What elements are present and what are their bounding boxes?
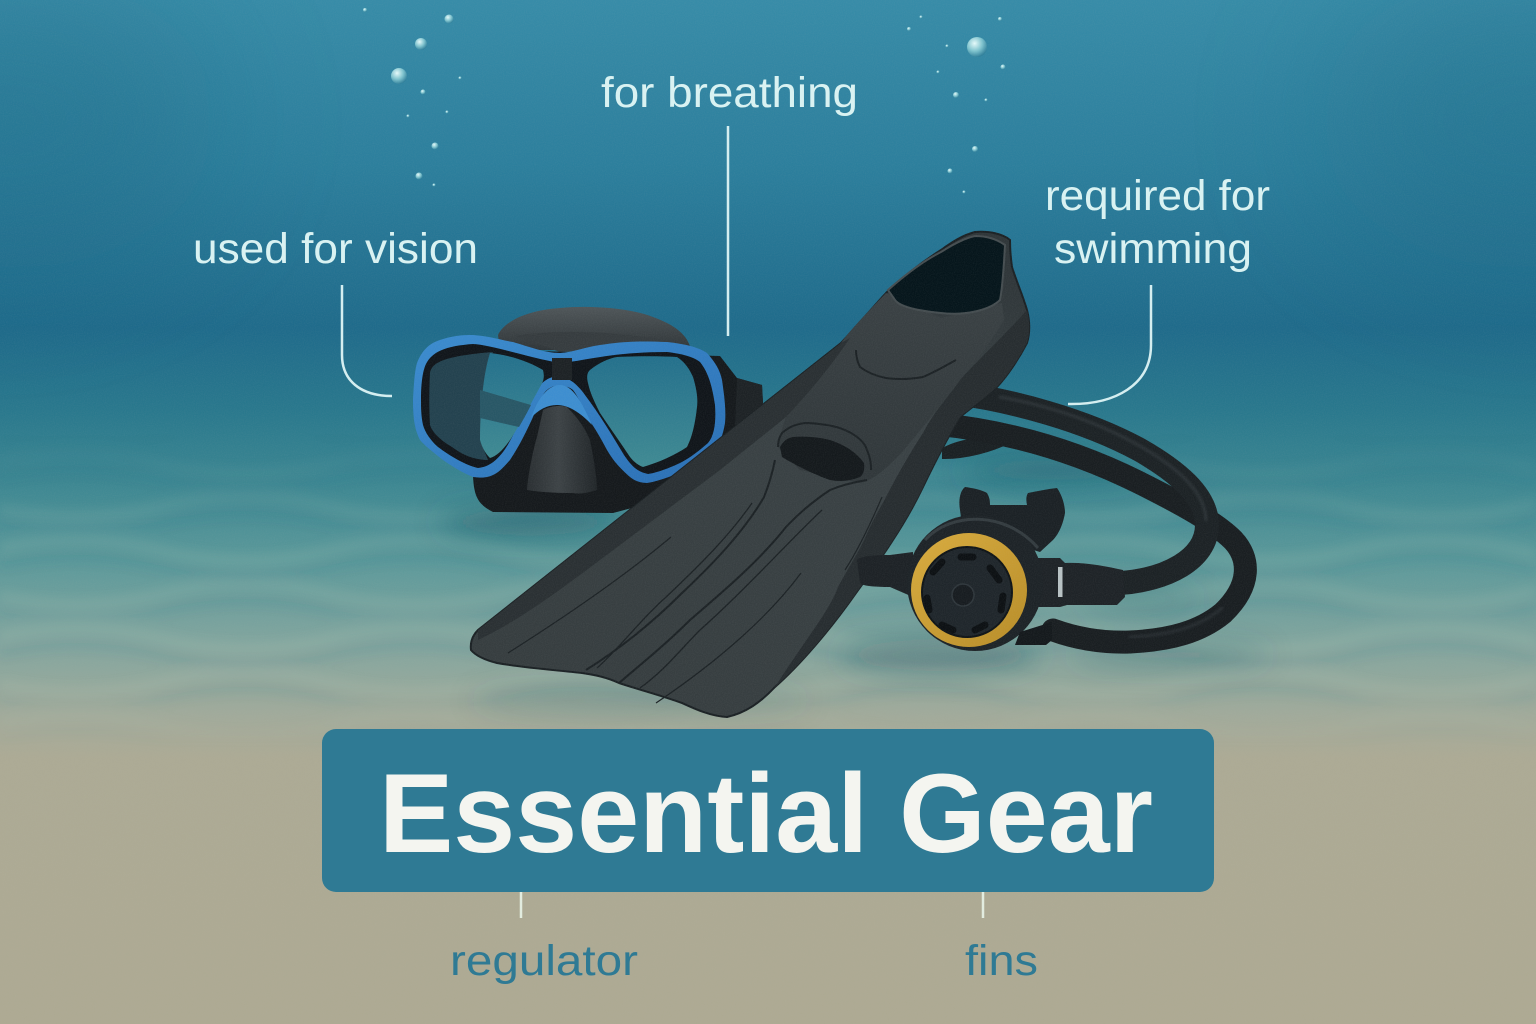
mask strap through lens [480, 390, 531, 427]
mask skirt dome [498, 307, 691, 350]
regulator housing [907, 515, 1043, 651]
fin foot pocket [778, 293, 1004, 483]
neck left [857, 552, 913, 597]
label: required for swimming: swimming [1054, 225, 1252, 273]
illustration: fin [471, 232, 1029, 717]
label: used for vision: used for vision [193, 225, 478, 273]
mask inner black frame [421, 344, 715, 474]
purge face [922, 547, 1012, 637]
label: for breathing: for breathing [601, 69, 858, 117]
mask buckle [735, 378, 763, 428]
purge slots [927, 557, 1003, 630]
fin strap slot [780, 437, 864, 481]
fin contour lines [508, 350, 956, 703]
fin blade outline [471, 232, 1029, 717]
mask left lens [480, 353, 544, 458]
shadows on the sand [440, 458, 1270, 712]
label: fins [965, 892, 1038, 985]
label: required for swimming: required for [1045, 172, 1270, 220]
mask inner skirt, left [429, 352, 493, 460]
title banner [322, 729, 1214, 892]
illustration: regulator hoses [935, 393, 1245, 642]
mask blue frame [413, 335, 725, 483]
mask body [473, 350, 763, 513]
fin left edge [478, 338, 850, 640]
mask blue nose accent [531, 385, 592, 425]
illustration: regulator [857, 487, 1125, 651]
title banner: Essential Gear [379, 751, 1153, 876]
icon: rising bubbles left [363, 8, 462, 186]
icon: rising bubbles right [907, 16, 1006, 194]
leader line [342, 285, 392, 396]
label: used for vision [193, 225, 478, 396]
label: fins: fins [965, 937, 1038, 985]
mouthpiece lugs [959, 487, 1065, 552]
label: regulator: regulator [450, 937, 638, 985]
background: sand ripples [6, 500, 1530, 692]
mask nose pocket [527, 406, 597, 494]
label: required for swimming [1045, 172, 1270, 404]
mask right lens [587, 356, 697, 467]
center button [952, 584, 974, 606]
fin right rail [775, 310, 1029, 687]
mask strap [478, 388, 545, 428]
ferrule [1058, 567, 1062, 597]
leader line [727, 126, 729, 336]
gold ring [911, 533, 1027, 647]
leader line [1068, 285, 1151, 404]
illustration: mask [413, 307, 763, 513]
fin foot opening [888, 236, 1005, 314]
connector right [1035, 558, 1125, 607]
mask nose bridge [552, 358, 572, 380]
